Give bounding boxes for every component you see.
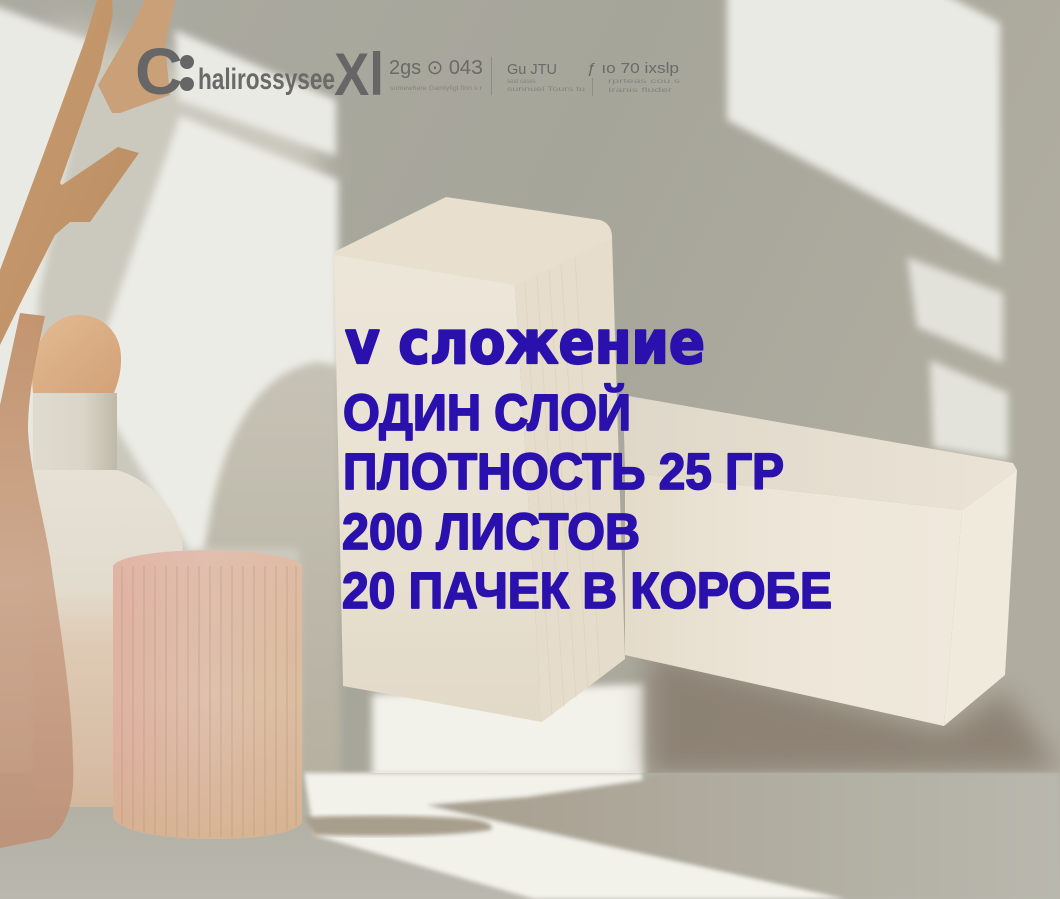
- product specification text: [342, 308, 832, 619]
- sheet lines: [525, 257, 600, 716]
- floor leaf shadow: [304, 816, 492, 836]
- dark shadow below horizontal pack: [648, 650, 1060, 776]
- spec: sheets: 200 ЛИСТОВ: [342, 503, 640, 560]
- bottle body: [33, 470, 183, 807]
- candle blush: [113, 550, 302, 839]
- upright paper towel pack: [334, 197, 625, 722]
- spec: density: ПЛОТНОСТЬ 25 ГР: [343, 443, 784, 500]
- pack end face: [944, 470, 1017, 726]
- header stat one: [389, 57, 483, 92]
- header stat three: Iranis fluder: [608, 88, 672, 94]
- wooden branch plant: [0, 0, 175, 345]
- glass vase: [0, 313, 73, 848]
- brand header strip: [135, 34, 680, 108]
- header stat three: ƒ ıo 70 ixslp: [587, 60, 679, 77]
- header stat three: [587, 60, 680, 94]
- candle body: [113, 550, 302, 839]
- ribbed candle: [113, 550, 302, 839]
- header stat two: [507, 61, 585, 93]
- floor light ray: [304, 773, 845, 899]
- heading: fold type: v сложение: [345, 308, 705, 378]
- brand logo: [135, 34, 384, 108]
- candle ribs: [122, 566, 296, 837]
- bottle neck: [33, 393, 117, 473]
- header stat two: seat cases: [507, 79, 536, 85]
- bottle cast shadow: [205, 362, 340, 776]
- header stat three: rprteas cou s: [608, 79, 680, 85]
- spec: packs per box: 20 ПАЧЕК В КОРОБЕ: [342, 562, 832, 619]
- pack side face: [515, 238, 625, 722]
- brand logo: C: [135, 34, 183, 108]
- pack top face: [334, 197, 612, 287]
- main branch: [0, 0, 139, 345]
- upper leaf: [98, 0, 175, 113]
- pack front face: [334, 255, 542, 722]
- header stat one: 2gs ⊙ 04З: [389, 57, 483, 79]
- bottle: [32, 315, 183, 807]
- left wall midtone: [0, 20, 320, 780]
- brand logo: Xl: [334, 41, 384, 108]
- brand logo: halirossysee: [198, 63, 335, 96]
- header stat two: Gu JTU: [507, 61, 557, 78]
- floor: [0, 773, 1060, 899]
- horizontal paper towel pack: [623, 395, 1017, 726]
- spec: one layer: ОДИН СЛОЙ: [343, 383, 631, 441]
- right floor tone: [426, 773, 1060, 899]
- pack side face: [625, 472, 962, 726]
- header stat one: somewhere Gamlyfigt finn s r: [390, 86, 482, 92]
- header stat two: sunnuel Tours tu: [507, 87, 585, 93]
- pack top face: [623, 395, 1017, 510]
- bottle stopper: [32, 315, 121, 393]
